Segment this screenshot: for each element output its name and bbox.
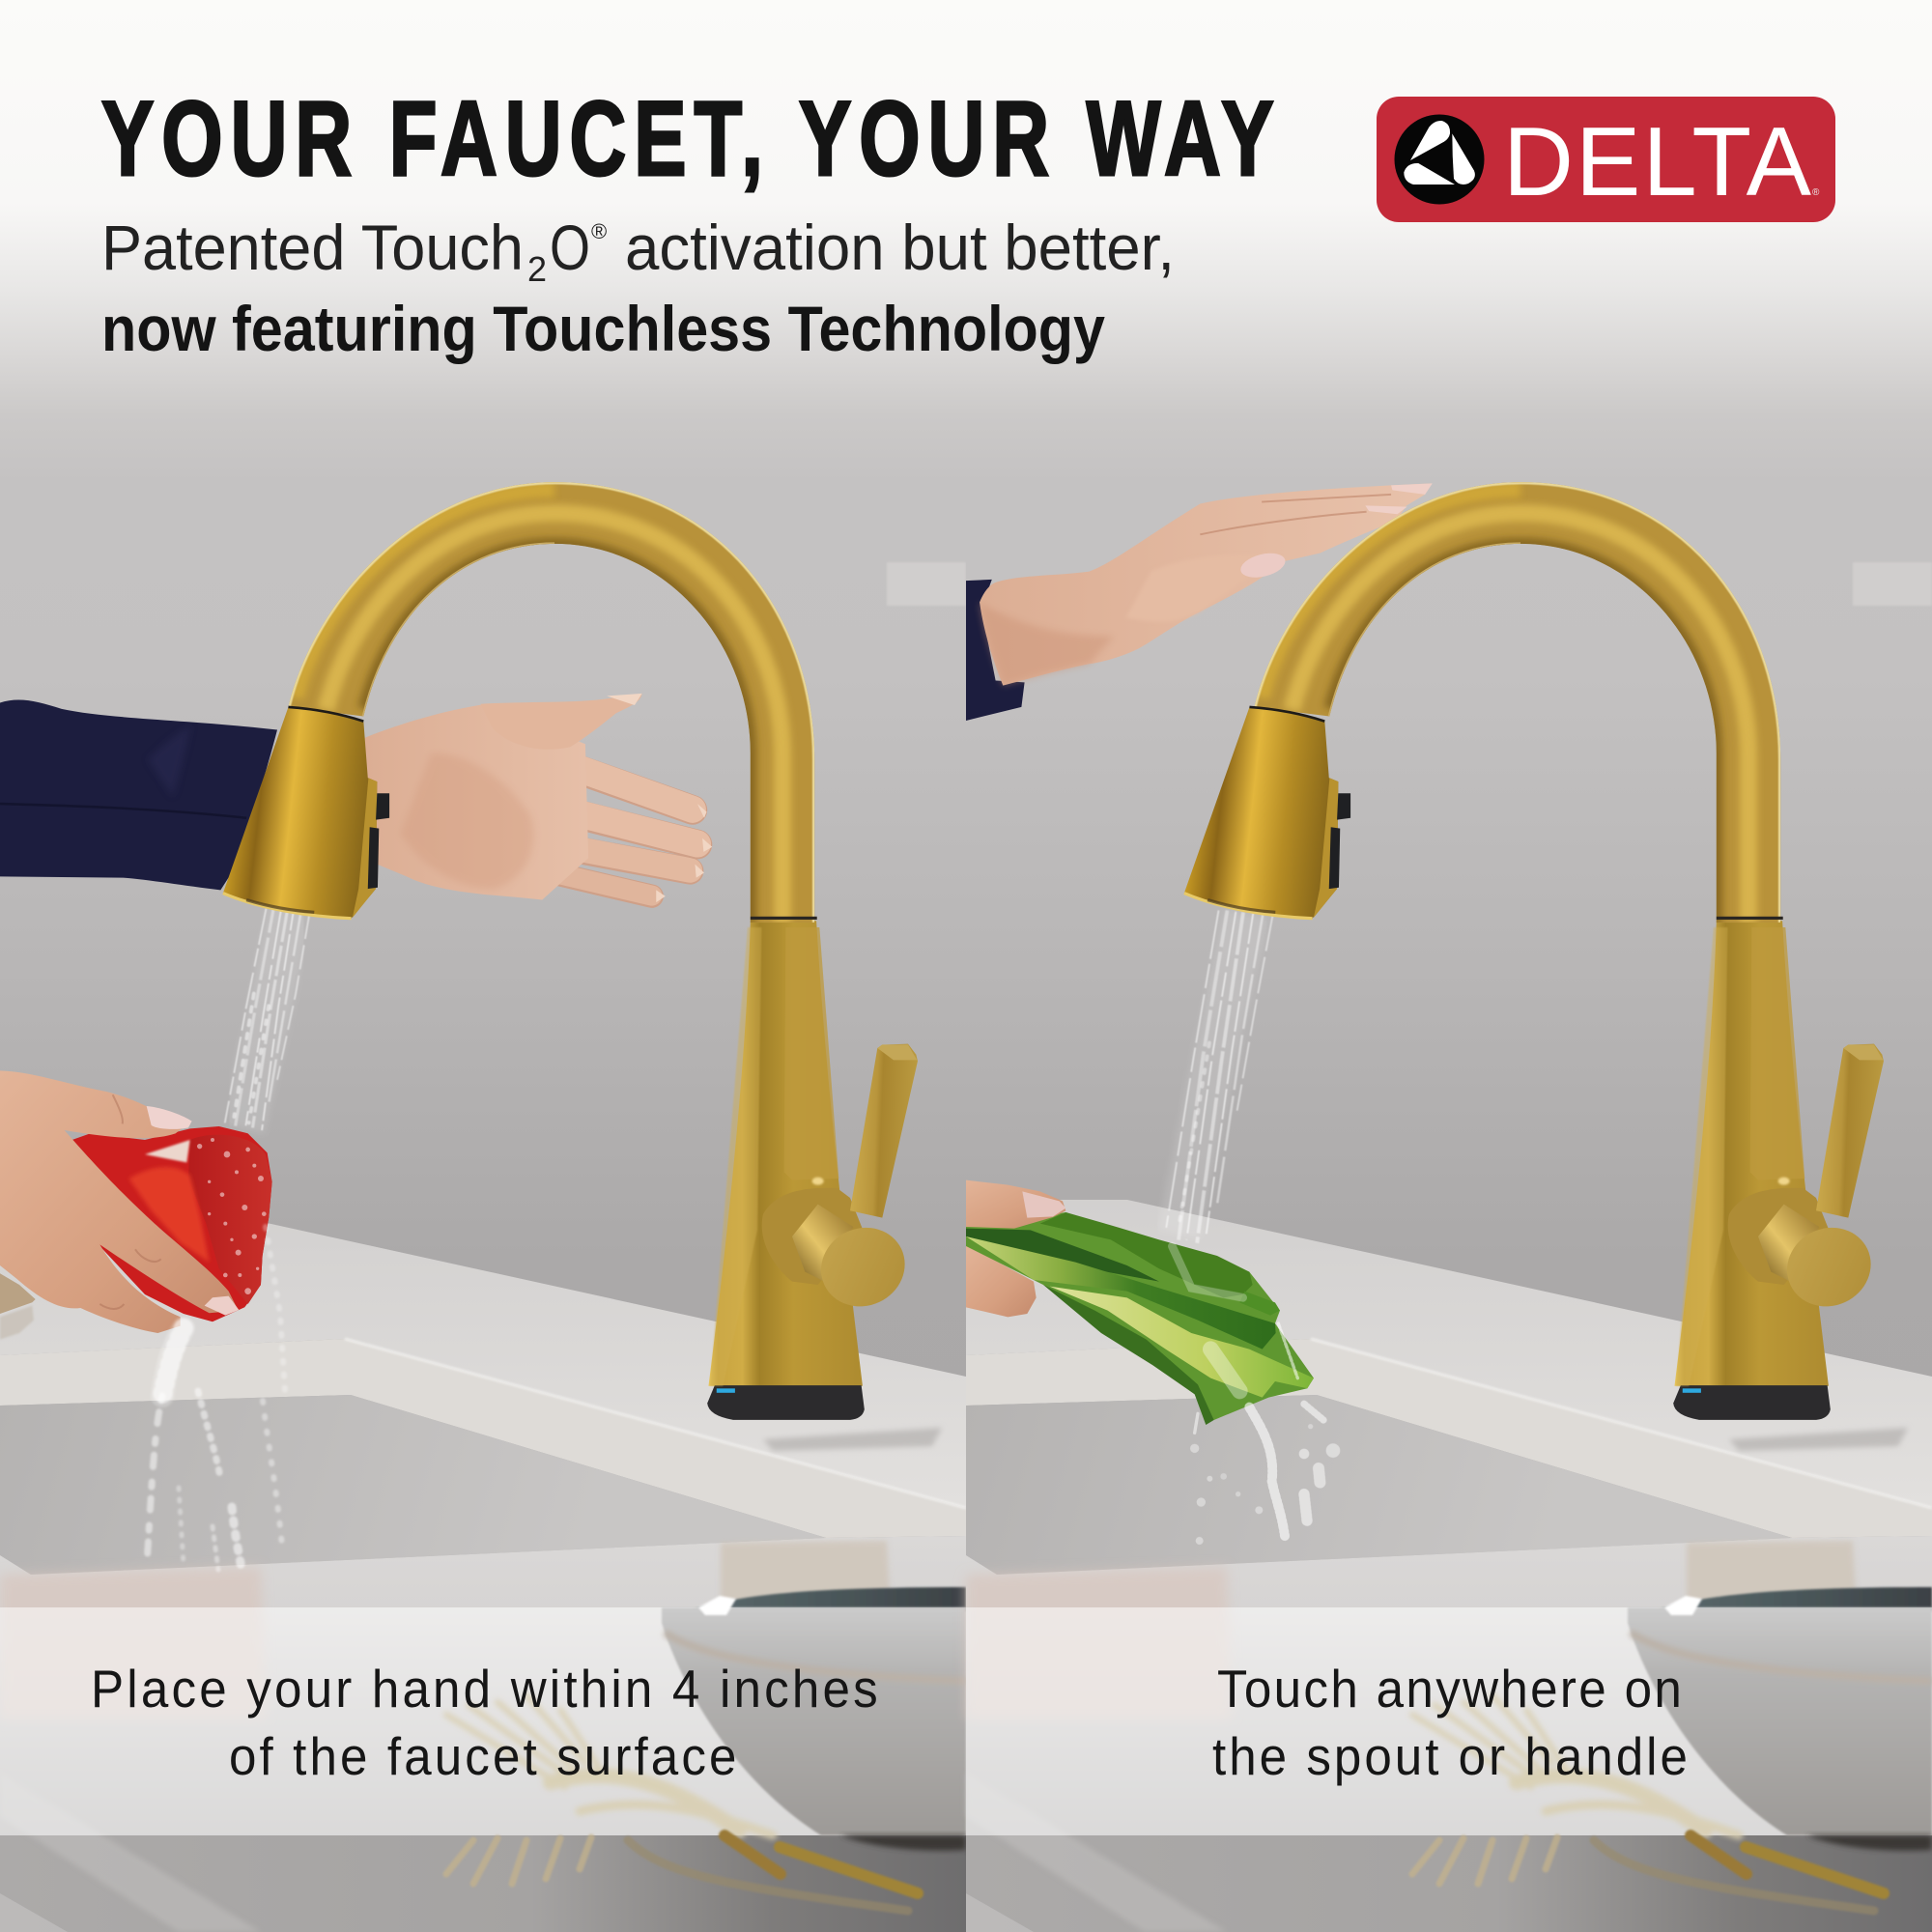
leek: upper stalk xyxy=(1040,1212,1253,1297)
thumb xyxy=(480,694,642,750)
faucet spout, body and handle xyxy=(288,482,918,1420)
left scene: water splash below pepper xyxy=(147,1227,285,1570)
logo registered mark: ® xyxy=(1812,187,1820,198)
leek: dark mid leaf xyxy=(966,1229,1159,1282)
subtitle line 1: ® xyxy=(591,219,607,243)
right scene: sleeve xyxy=(966,580,1025,721)
caption left: Place your hand within 4 inches xyxy=(91,1660,878,1719)
subtitle line 1: activation but better, xyxy=(625,212,1175,283)
caption right: the spout or handle xyxy=(1212,1727,1688,1786)
left scene: red pepper xyxy=(68,1126,272,1321)
faucet right xyxy=(1184,482,1884,1420)
subtitle line 1: O xyxy=(550,212,590,283)
faucet spout, body and handle right xyxy=(1254,482,1884,1420)
leek: broad front leaf xyxy=(966,1236,1276,1350)
subtitle line 1: Patented Touch xyxy=(101,212,524,283)
leek: light lower stalk xyxy=(1050,1287,1314,1398)
left scene: water spray xyxy=(225,908,309,1130)
left scene: sleeve xyxy=(0,699,277,890)
left scene: hand holding pepper xyxy=(0,1070,239,1333)
cutting board xyxy=(0,1273,36,1340)
leek: dark lower leaves xyxy=(1043,1285,1214,1425)
panel: left scene background xyxy=(0,0,966,1932)
caption right xyxy=(1212,1660,1688,1786)
left scene: open hand near spout xyxy=(365,694,712,902)
finger nails xyxy=(607,694,712,902)
lower finger xyxy=(966,1244,1037,1317)
logo wordmark: DELTA xyxy=(1503,108,1812,216)
panel: right scene background xyxy=(966,0,1932,1932)
leek: stalk tip xyxy=(1239,1292,1280,1316)
fingers xyxy=(554,764,697,896)
palm shading xyxy=(401,753,534,889)
caption left: of the faucet surface xyxy=(229,1727,736,1786)
pull-down spray head left xyxy=(223,707,389,919)
caption right: Touch anywhere on xyxy=(1217,1660,1682,1719)
palm xyxy=(365,704,588,900)
subtitle line 1: 2 xyxy=(527,249,547,289)
subtitle line 1 xyxy=(101,212,1175,289)
caption left xyxy=(91,1660,878,1786)
Delta logo xyxy=(1377,97,1835,222)
subtitle line 2: now featuring Touchless Technology xyxy=(101,293,1105,364)
wall, counter and sink backdrop right xyxy=(966,0,1932,1932)
right scene: hand touching spout xyxy=(980,483,1433,686)
pull-down spray head right xyxy=(1184,707,1350,919)
water on leek and splash xyxy=(1172,1246,1340,1545)
faucet left xyxy=(223,482,918,1420)
right scene: water spray xyxy=(1166,910,1273,1243)
leek: silhouette fill xyxy=(966,1212,1314,1420)
upper thumb xyxy=(966,1180,1065,1229)
wall, counter and sink backdrop xyxy=(0,0,966,1932)
logo red badge xyxy=(1377,97,1835,222)
icon: Delta emblem xyxy=(1395,114,1484,205)
thumb nail xyxy=(1022,1191,1065,1218)
right scene: hand and leek bunch xyxy=(966,1180,1340,1545)
title: YOUR FAUCET, YOUR WAY xyxy=(101,78,1274,198)
